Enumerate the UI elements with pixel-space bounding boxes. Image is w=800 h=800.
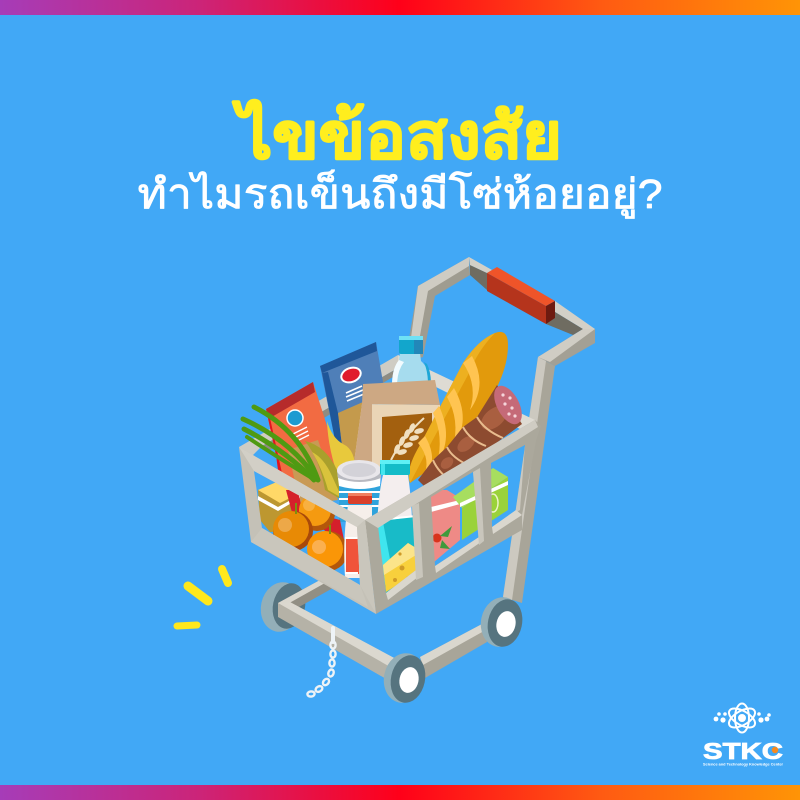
basket vertical bar highlights bbox=[412, 468, 484, 580]
basket left face bbox=[239, 447, 376, 614]
basket left lower rail bbox=[251, 528, 368, 607]
logo atom icon bbox=[726, 704, 758, 732]
cart right wheel bbox=[476, 593, 527, 651]
bottle bbox=[392, 336, 431, 386]
cart handle bbox=[405, 257, 595, 366]
handle inner dark faces bbox=[470, 265, 583, 335]
basket corner post bbox=[357, 520, 376, 614]
salami bbox=[418, 381, 528, 492]
handle top light faces bbox=[469, 257, 595, 329]
green onions bbox=[243, 407, 318, 480]
wheat bbox=[391, 418, 425, 460]
cart right post bbox=[503, 357, 555, 603]
cart front wheel bbox=[379, 649, 430, 707]
basket right face bbox=[365, 420, 541, 614]
top gradient bar bbox=[0, 0, 800, 15]
milk bottle bbox=[377, 460, 412, 530]
yellow box bbox=[258, 481, 300, 532]
logo side dots bbox=[714, 712, 771, 723]
basket right rim highlight bbox=[365, 420, 538, 528]
shopping cart illustration bbox=[239, 257, 595, 707]
cart front basket frame bbox=[239, 420, 541, 614]
bottom gradient bar bbox=[0, 785, 800, 800]
red ribbon behind oranges bbox=[286, 490, 345, 545]
handle grip bbox=[487, 267, 555, 324]
cart base frame bbox=[278, 580, 487, 680]
ketchup bottle bbox=[344, 493, 372, 578]
blue snack bag bbox=[320, 342, 383, 470]
bananas bbox=[305, 421, 355, 500]
cart back rim bbox=[239, 355, 535, 456]
can bbox=[337, 460, 381, 522]
title: ไขข้อสงสัย bbox=[232, 99, 562, 172]
baguette bbox=[409, 332, 508, 483]
logo tagline: Science and Technology Knowledge Center bbox=[703, 762, 784, 766]
pink box bbox=[431, 490, 460, 562]
subtitle: ทำไมรถเข็นถึงมีโซ่ห้อยอยู่? bbox=[138, 170, 662, 219]
paper bag bbox=[353, 380, 440, 470]
STKC logo bbox=[703, 704, 784, 766]
orange snack bag bbox=[266, 382, 340, 520]
oranges bbox=[273, 494, 348, 571]
cheese wedge bbox=[383, 543, 416, 592]
icon: yellow motion sparks bbox=[177, 569, 228, 626]
teal carton bbox=[376, 516, 416, 595]
basket right lower rail highlights bbox=[386, 510, 522, 600]
groceries bbox=[243, 332, 528, 595]
logo wordmark: STKC bbox=[703, 738, 783, 764]
green box bbox=[453, 468, 508, 540]
logo orange dot bbox=[772, 747, 778, 753]
hanging chain bbox=[307, 628, 336, 697]
basket left rim highlight bbox=[239, 447, 365, 527]
cart back-left wheel bbox=[256, 578, 309, 636]
